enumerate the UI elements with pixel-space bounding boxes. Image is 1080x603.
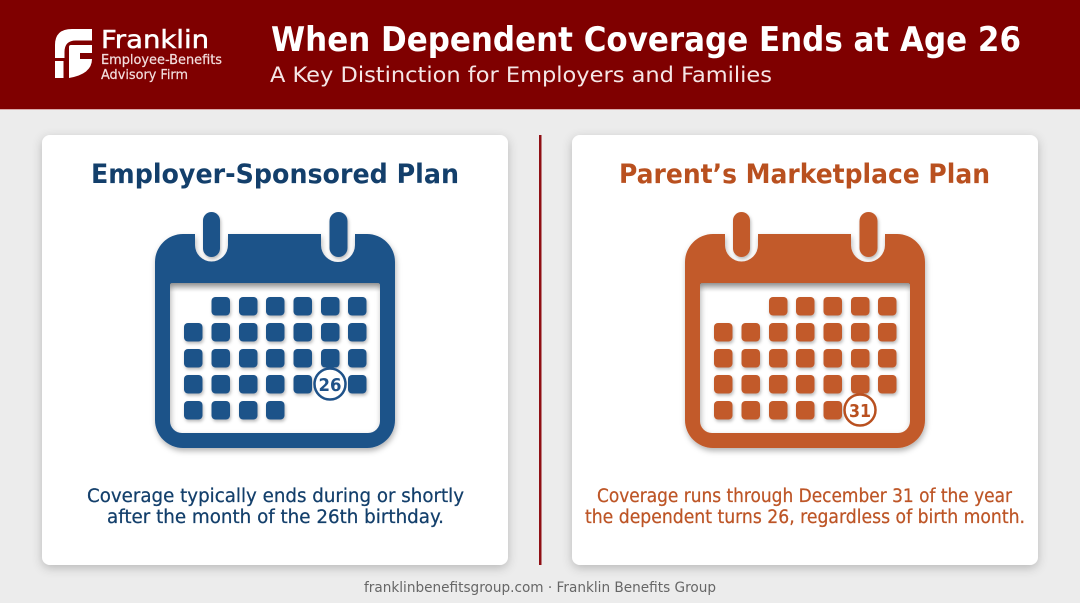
logo wordmark: Employee-Benefits bbox=[101, 53, 222, 68]
logo wordmark bbox=[101, 25, 222, 83]
panel description: Coverage typically ends during or shortly bbox=[87, 486, 464, 507]
date marker 26 bbox=[314, 368, 346, 400]
panel description: Coverage runs through December 31 of the year bbox=[597, 486, 1012, 507]
date marker 26: 26 bbox=[318, 375, 342, 396]
panel description: after the month of the 26th birthday. bbox=[107, 507, 444, 528]
icon: blue calendar bbox=[155, 212, 395, 448]
header band bbox=[0, 0, 1080, 110]
panel heading: Employer-Sponsored Plan bbox=[91, 159, 459, 190]
panel description bbox=[87, 486, 464, 528]
icon: Franklin logo bbox=[55, 29, 92, 78]
divider bbox=[539, 135, 542, 565]
icon: orange calendar bbox=[685, 212, 925, 448]
title: When Dependent Coverage Ends at Age 26 bbox=[271, 20, 1021, 60]
panel description bbox=[585, 486, 1025, 528]
panel: parent's marketplace plan bbox=[572, 135, 1038, 565]
logo wordmark: Advisory Firm bbox=[101, 68, 188, 83]
logo wordmark: Franklin bbox=[101, 25, 209, 54]
panel: employer-sponsored plan bbox=[42, 135, 508, 565]
date marker 31 bbox=[844, 394, 876, 426]
subtitle: A Key Distinction for Employers and Families bbox=[270, 63, 772, 88]
panel card bbox=[42, 135, 508, 565]
date marker 31: 31 bbox=[849, 401, 871, 422]
panel heading: Parent’s Marketplace Plan bbox=[619, 159, 990, 190]
panel card bbox=[572, 135, 1038, 565]
footer: franklinbenefitsgroup.com · Franklin Benefits Group bbox=[364, 580, 716, 596]
panel description: the dependent turns 26, regardless of birth month. bbox=[585, 507, 1025, 528]
